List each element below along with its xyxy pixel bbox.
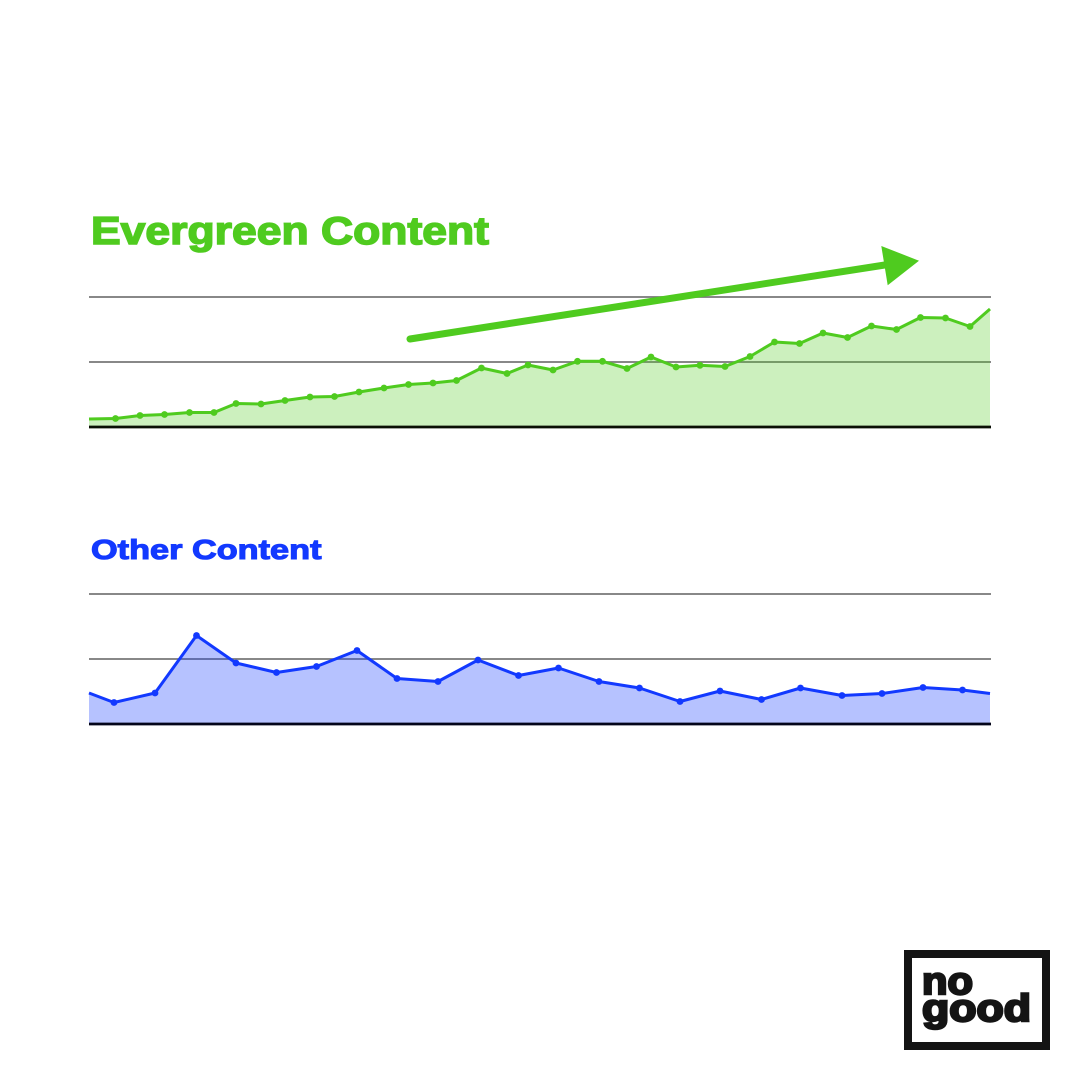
logo: no good: no [922,961,973,1003]
area fill: evergreen [89,309,990,427]
line: other content trend [89,636,990,702]
baseline: other content [89,723,991,725]
heading: Other Content: Other Content [91,534,322,565]
logo: no good: good [922,988,1031,1030]
data points: other content [111,632,966,706]
chart: other content traffic [89,594,991,724]
line: evergreen trend [89,309,990,419]
arrow: upward growth trend [410,246,919,339]
logo: no good [908,954,1046,1046]
title: Evergreen Content: Evergreen Content [91,210,489,253]
baseline: evergreen [89,426,991,428]
area fill: other content [89,636,990,724]
data points: evergreen [112,314,973,422]
chart: evergreen content traffic [89,297,991,427]
